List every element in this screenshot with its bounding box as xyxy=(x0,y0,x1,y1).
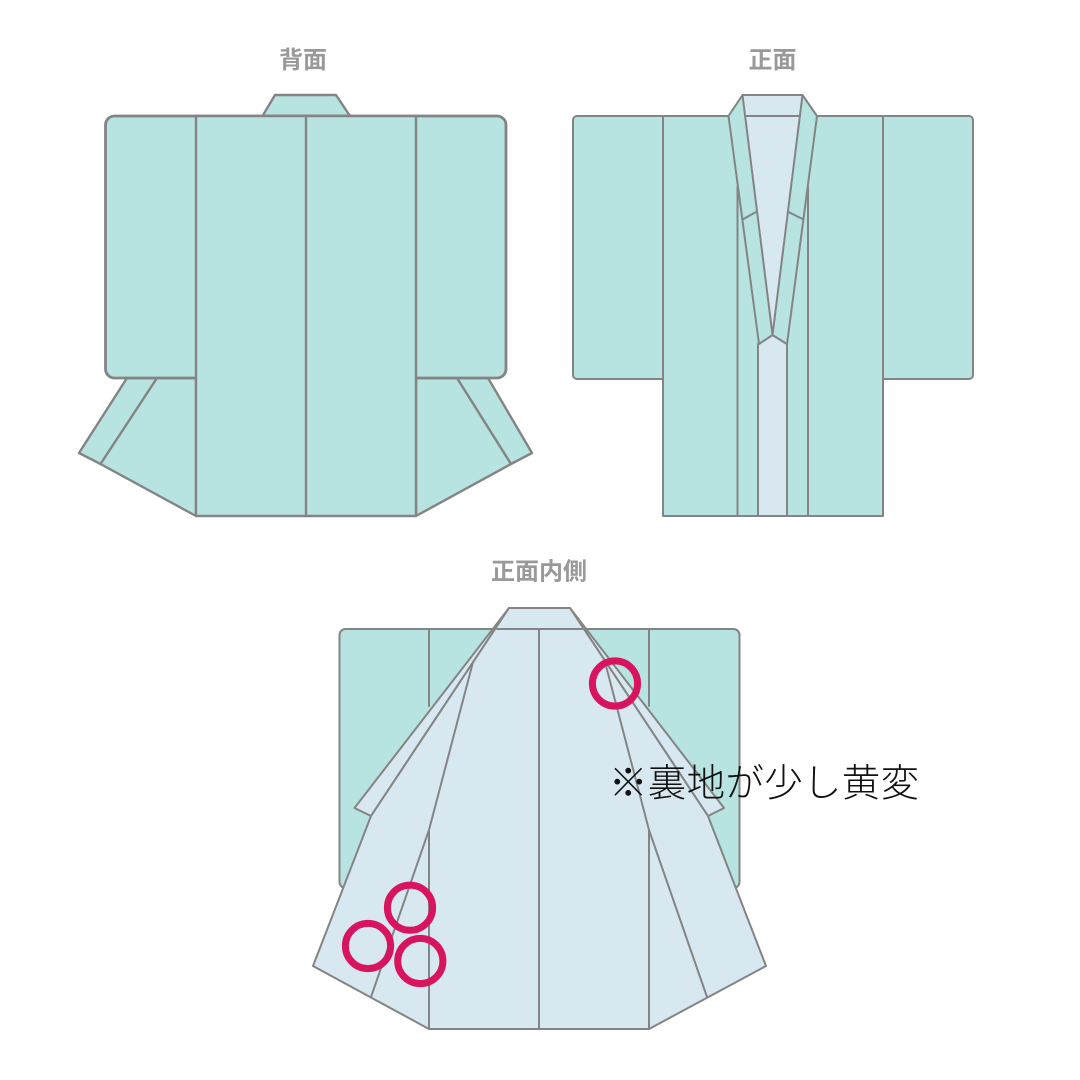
gusset seams xyxy=(100,378,511,464)
note: lining slightly yellowed: ※裏地が少し黄変 xyxy=(609,762,919,806)
right collar band xyxy=(772,95,817,344)
inner lining xyxy=(313,608,766,1029)
left skirt gusset xyxy=(79,378,196,516)
sleeves xyxy=(573,116,973,379)
lining seams xyxy=(371,629,707,1029)
collar inner lining xyxy=(743,95,802,335)
right collar flap xyxy=(570,608,724,816)
marker: stain lower 3 xyxy=(398,938,443,984)
panel: inside front view xyxy=(313,558,919,1029)
marker: stain near collar xyxy=(592,661,638,706)
overlap seams xyxy=(738,187,808,516)
collar top edge and neck line xyxy=(742,95,802,116)
left collar band xyxy=(728,95,772,344)
centre back seam xyxy=(305,116,307,516)
front body xyxy=(663,116,883,516)
heading: inside front view: 正面内側 xyxy=(491,558,587,586)
heading: back view: 背面 xyxy=(279,47,327,74)
back panel behind xyxy=(340,629,740,888)
collar ticks xyxy=(742,212,804,220)
sleeves and shoulders xyxy=(106,116,506,378)
back collar xyxy=(262,95,350,116)
right skirt gusset xyxy=(416,378,532,516)
marker: stain lower 2 xyxy=(345,923,391,969)
body panels xyxy=(196,116,416,516)
panel: back view xyxy=(79,47,532,516)
panel: front view xyxy=(573,47,973,516)
sleeve seams xyxy=(429,629,649,706)
marker: stain lower 1 xyxy=(387,885,433,930)
left collar flap xyxy=(354,608,509,816)
heading: front view: 正面 xyxy=(748,47,796,74)
inner lining strip xyxy=(758,335,787,516)
